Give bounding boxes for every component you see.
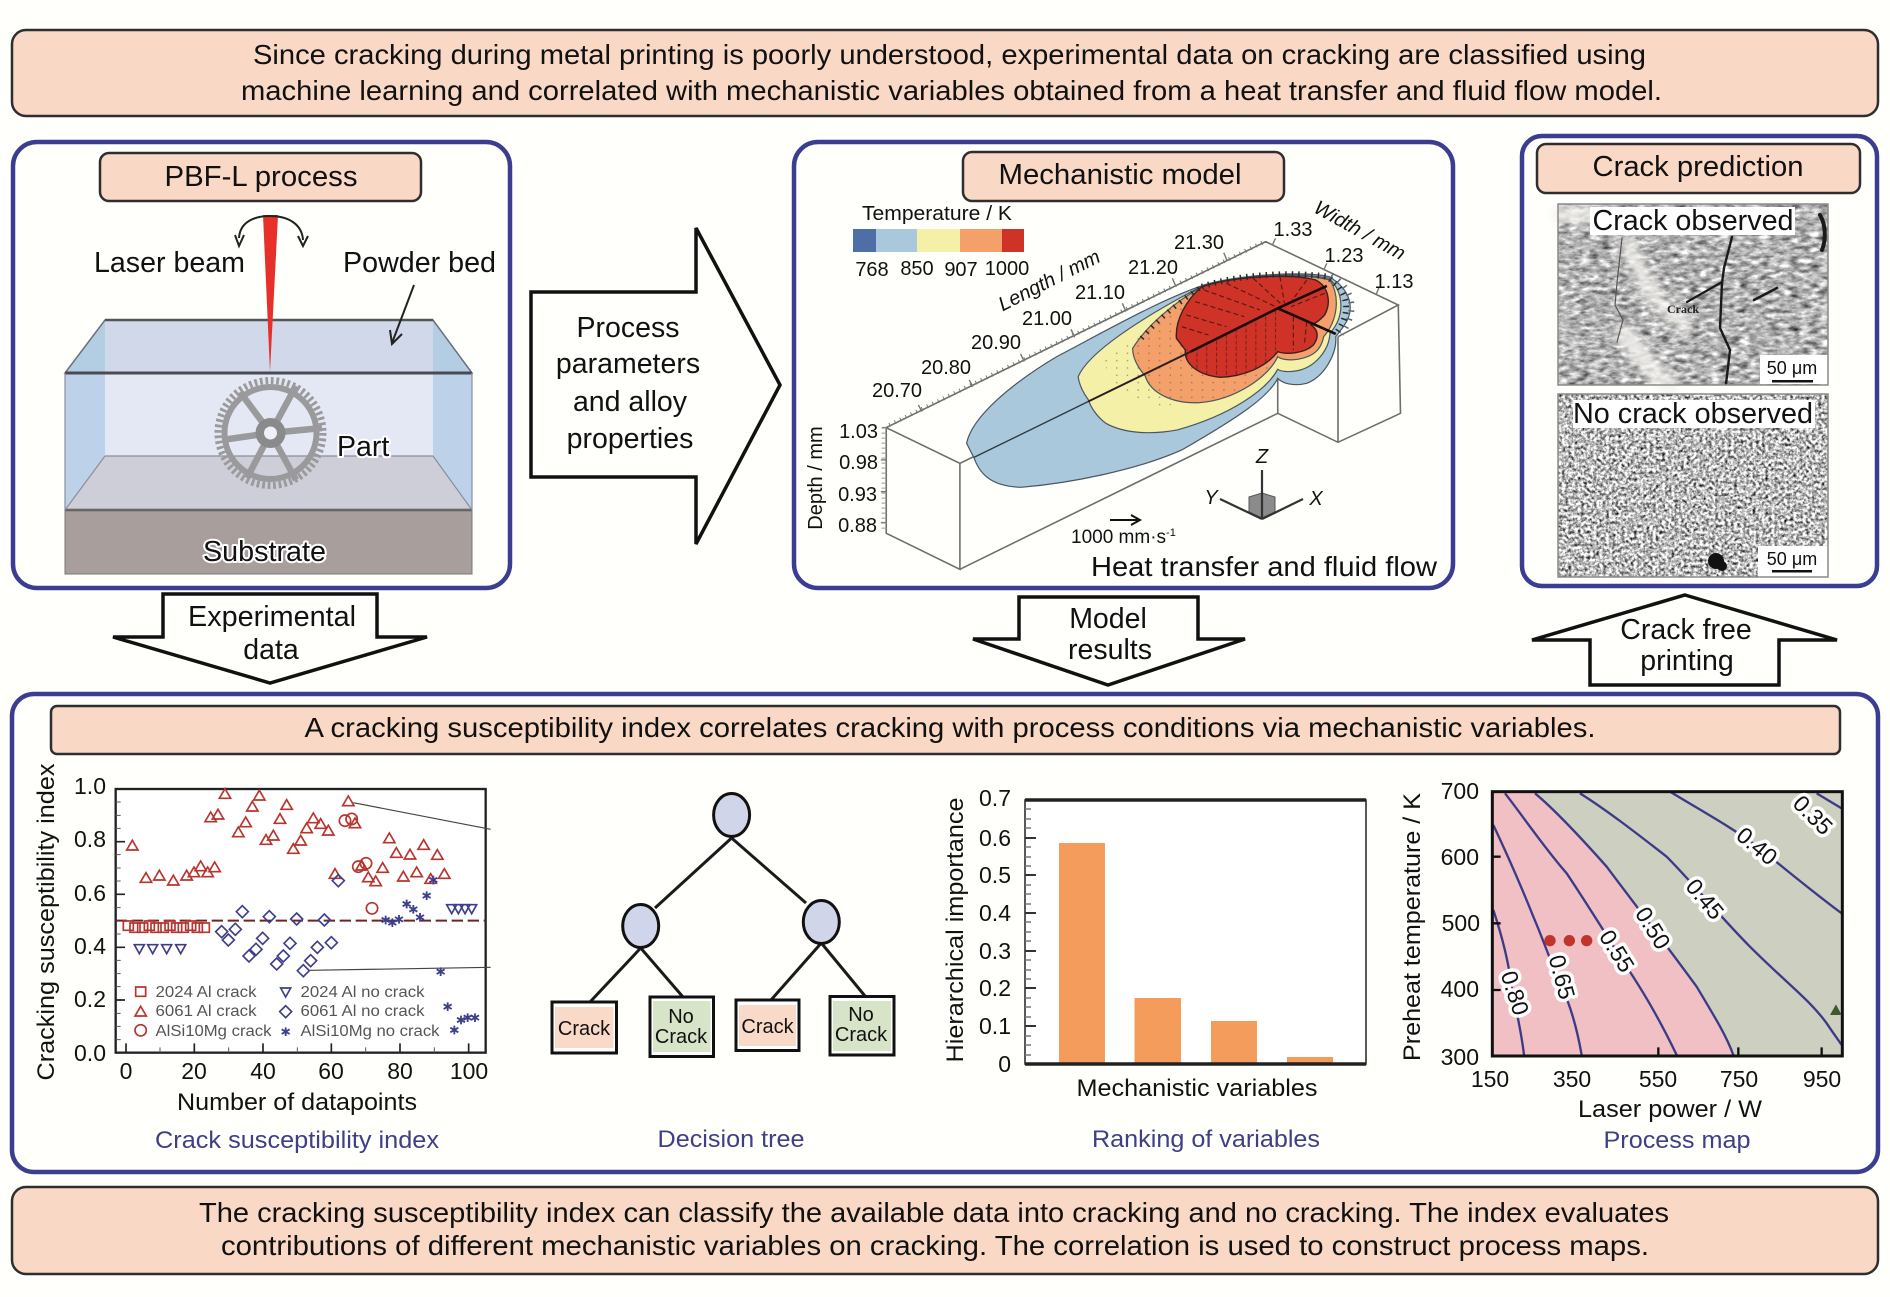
chart: ranking of variables bars xyxy=(942,785,1366,1102)
x axis labels: 60 xyxy=(318,1058,344,1084)
axis labels: length: 20.70 xyxy=(872,380,922,402)
contour labels: 0.45 xyxy=(1681,873,1729,925)
heading: cracking susceptibility index: A cracking susceptibility index correlates cracking with process conditions via mechanistic variables. xyxy=(304,712,1596,743)
process map x axis labels: 950 xyxy=(1803,1066,1841,1092)
micrograph: crack observed: Crack xyxy=(1667,302,1699,316)
leaf: no crack: No xyxy=(668,1006,694,1028)
bars xyxy=(1059,843,1333,1064)
axis labels: depth: Depth / mm xyxy=(805,426,827,530)
velocity scale arrow: 1000 mm·s xyxy=(1071,527,1166,548)
contour labels: 0.35 xyxy=(1788,790,1838,840)
x axis labels: 40 xyxy=(250,1058,276,1084)
legend labels xyxy=(156,984,440,1040)
leaf: crack: Crack xyxy=(558,1018,611,1040)
bar chart axis labels: 0.5 xyxy=(979,862,1011,888)
contour: orange xyxy=(1133,276,1336,403)
bar chart axis labels: Mechanistic variables xyxy=(1076,1075,1318,1102)
series: AlSi10Mg no crack xyxy=(382,876,479,1034)
legend markers xyxy=(135,987,292,1036)
leaf: crack xyxy=(736,1000,799,1050)
legend: temperature: Temperature / K xyxy=(862,203,1013,225)
x axis labels: 20 xyxy=(181,1058,207,1084)
flow vectors xyxy=(1182,277,1325,350)
series: 6061 Al no crack xyxy=(216,875,344,977)
panel: cracking susceptibility index xyxy=(12,694,1878,1172)
panel: PBF-L process xyxy=(13,142,510,588)
leaf: no crack xyxy=(650,997,714,1056)
y axis labels: 0.2 xyxy=(74,986,106,1012)
series: AlSi10Mg crack xyxy=(339,813,378,914)
heading: PBF-L process: PBF-L process xyxy=(164,161,358,193)
caption: crack susceptibility index: Crack susceptibility index xyxy=(155,1127,439,1154)
micrograph: crack observed xyxy=(1558,204,1828,385)
process map x axis labels: Laser power / W xyxy=(1578,1096,1762,1123)
arrow: model results: results xyxy=(1068,634,1152,666)
leaf: crack: Crack xyxy=(741,1016,795,1038)
arrow: model results xyxy=(973,597,1245,685)
y axis labels: Cracking susceptibility index xyxy=(33,764,60,1080)
arrow: process parameters and alloy properties: Process xyxy=(577,312,679,344)
contour labels: 0.80 xyxy=(1496,968,1534,1018)
icon: XYZ axes: Z xyxy=(1255,446,1269,468)
y axis labels: 0.6 xyxy=(74,880,106,906)
x axis labels: Number of datapoints xyxy=(177,1089,417,1116)
x axis labels: 0 xyxy=(120,1058,132,1084)
bar chart axis labels: 0.6 xyxy=(979,825,1011,851)
process map x axis labels: 150 xyxy=(1471,1066,1509,1092)
heading: PBF-L process xyxy=(100,153,421,201)
process map y axis labels xyxy=(1399,778,1480,1070)
axis labels: width: 1.13 xyxy=(1375,271,1413,293)
axis labels: length: 21.20 xyxy=(1128,257,1178,279)
diagram: decision tree xyxy=(552,794,894,1056)
panel: Mechanistic model xyxy=(794,142,1453,588)
series: 2024 Al crack xyxy=(123,921,209,932)
bar chart axis labels: Hierarchical importance xyxy=(942,798,969,1062)
series: 6061 Al crack xyxy=(127,789,450,886)
heading: Mechanistic model xyxy=(963,152,1284,201)
contour: blue xyxy=(967,274,1350,487)
axis labels: width: 1.23 xyxy=(1325,245,1363,267)
axis labels: width xyxy=(1274,197,1413,293)
3D melt pool model xyxy=(881,238,1400,569)
process map x axis labels xyxy=(1471,1066,1841,1123)
plot area xyxy=(116,789,491,1053)
caption: process map: Process map xyxy=(1604,1127,1750,1154)
axis labels: length: 20.90 xyxy=(971,332,1021,354)
axis labels: depth: 0.98 xyxy=(839,452,878,474)
label: Substrate: Substrate xyxy=(203,536,326,568)
caption: decision tree: Decision tree xyxy=(658,1126,804,1153)
leaf: no crack xyxy=(830,996,894,1055)
series: 2024 Al no crack xyxy=(134,905,477,954)
block outline xyxy=(886,242,1400,569)
icon: XYZ axes: Y xyxy=(1204,487,1219,509)
heading: Mechanistic model: Mechanistic model xyxy=(998,159,1242,191)
axis labels: depth: 0.93 xyxy=(838,484,877,506)
top summary banner xyxy=(12,30,1878,116)
caption: heat transfer and fluid flow: Heat transfer and fluid flow xyxy=(1091,551,1437,582)
micrograph: crack observed: 50 μm xyxy=(1767,358,1817,378)
x axis labels: 100 xyxy=(450,1058,488,1084)
arrow: crack free printing: printing xyxy=(1640,645,1734,677)
bar chart axis labels: 0.7 xyxy=(979,785,1011,811)
centre lines xyxy=(974,402,1088,457)
axis labels: depth: 0.88 xyxy=(838,515,877,537)
bottom summary banner xyxy=(12,1187,1878,1274)
micrograph: no crack observed: 50 μm xyxy=(1767,549,1817,569)
arrow: experimental data: data xyxy=(243,634,299,666)
arrow: experimental data xyxy=(113,594,427,683)
arrow: model results: Model xyxy=(1069,603,1147,635)
axis labels: depth xyxy=(805,421,878,537)
icon: laser beam xyxy=(263,215,278,372)
icon: gear part xyxy=(218,380,323,486)
heading: Crack prediction: Crack prediction xyxy=(1592,151,1804,183)
contour labels: 0.65 xyxy=(1544,952,1580,1002)
process map y axis labels: 700 xyxy=(1441,778,1479,804)
map regions xyxy=(1492,792,1842,1056)
node: left xyxy=(623,904,659,948)
arrow: process parameters and alloy properties: properties xyxy=(567,423,693,455)
micrograph: crack observed: Crack observed xyxy=(1592,205,1794,237)
contour labels: 0.55 xyxy=(1594,925,1640,977)
y axis labels: 0.0 xyxy=(74,1040,106,1066)
leaf: no crack: Crack xyxy=(655,1026,708,1048)
heading: cracking susceptibility index xyxy=(51,706,1840,754)
legend: temperature: 850 xyxy=(900,258,934,280)
caption: ranking of variables: Ranking of variables xyxy=(1092,1126,1320,1153)
icon: laser scan arc arrows xyxy=(235,216,308,246)
velocity scale arrow xyxy=(1071,515,1176,548)
legend: temperature: 907 xyxy=(944,259,978,281)
arrow: crack free printing xyxy=(1532,595,1837,685)
axis labels: depth: 1.03 xyxy=(839,421,878,443)
process map y axis labels: 500 xyxy=(1442,910,1480,936)
top summary banner: machine learning and correlated with mechanistic variables obtained from a heat transfer and fluid flow model. xyxy=(241,75,1662,106)
leaf: no crack: Crack xyxy=(835,1024,888,1046)
contour labels: 0.40 xyxy=(1731,822,1783,870)
micrograph: no crack observed xyxy=(1558,394,1828,577)
legend labels: 2024 Al no crack xyxy=(300,984,425,1001)
axis labels: length: Length / mm xyxy=(995,246,1104,316)
axis labels: width: Width / mm xyxy=(1310,197,1409,265)
panel: Crack prediction xyxy=(1522,136,1877,586)
process map x axis labels: 350 xyxy=(1553,1066,1591,1092)
axis labels: length: 21.30 xyxy=(1174,232,1224,254)
y axis labels: 1.0 xyxy=(74,773,106,799)
marker: green triangle xyxy=(1830,1004,1842,1015)
micrograph: no crack observed: No crack observed xyxy=(1573,398,1813,430)
y axis labels: 0.8 xyxy=(74,826,106,852)
bar chart axis labels: 0.3 xyxy=(979,938,1011,964)
icon: XYZ axes: X xyxy=(1308,488,1323,510)
process map y axis labels: 600 xyxy=(1441,844,1479,870)
arrow: powder bed pointer xyxy=(390,285,414,344)
x axis labels: 80 xyxy=(387,1058,413,1084)
y axis labels xyxy=(33,764,106,1080)
axis ticks xyxy=(881,238,1379,523)
x axis labels xyxy=(120,1058,488,1116)
legend labels: 6061 Al crack xyxy=(156,1003,257,1020)
heading: Crack prediction xyxy=(1537,144,1860,193)
chart: process map xyxy=(1399,778,1842,1123)
axis labels: length: 21.00 xyxy=(1022,308,1072,330)
legend: temperature xyxy=(853,203,1029,281)
top summary banner: Since cracking during metal printing is poorly understood, experimental data on cracking are classified using xyxy=(253,39,1646,70)
contour: yellow xyxy=(1078,275,1341,433)
chart: crack susceptibility index scatter xyxy=(33,764,491,1116)
label: Part: Part xyxy=(337,431,389,463)
frame xyxy=(1492,792,1842,1056)
process map y axis labels: Preheat temperature / K xyxy=(1399,793,1426,1061)
marker: red data points xyxy=(1544,935,1592,946)
process map y axis labels: 400 xyxy=(1441,976,1479,1002)
leaf: no crack: No xyxy=(848,1004,874,1026)
legend labels: AlSi10Mg no crack xyxy=(300,1023,440,1040)
arrow: crack free printing: Crack free xyxy=(1620,614,1752,646)
axis labels: length xyxy=(872,232,1224,402)
bottom summary banner: contributions of different mechanistic variables on cracking. The correlation is used to construct process maps. xyxy=(221,1230,1649,1261)
arrow: process parameters and alloy properties: parameters xyxy=(556,348,700,380)
legend labels: AlSi10Mg crack xyxy=(156,1023,272,1040)
bar chart axis labels: 0.1 xyxy=(979,1013,1011,1039)
arrow: process parameters and alloy properties: and alloy xyxy=(573,386,688,418)
node: right xyxy=(803,900,839,944)
contour: red xyxy=(1176,276,1328,377)
contour labels: 0.50 xyxy=(1630,902,1676,954)
axis labels: length: 20.80 xyxy=(921,357,971,379)
powder bed chamber illustration xyxy=(65,320,472,574)
label: Laser beam: Laser beam xyxy=(94,247,245,279)
bar chart axis labels: 0.4 xyxy=(979,900,1011,926)
bar chart axis labels: 0 xyxy=(998,1051,1011,1077)
process map x axis labels: 550 xyxy=(1639,1066,1677,1092)
icon: XYZ axes xyxy=(1204,446,1323,519)
axis labels: length: 21.10 xyxy=(1075,282,1125,304)
legend labels: 2024 Al crack xyxy=(156,984,257,1001)
label: Powder bed: Powder bed xyxy=(343,247,496,279)
bar chart axis labels xyxy=(942,785,1318,1102)
legend: temperature: 768 xyxy=(855,259,889,281)
y axis labels: 0.4 xyxy=(74,933,106,959)
arrow: experimental data: Experimental xyxy=(188,601,356,633)
legend: temperature: 1000 xyxy=(985,258,1029,280)
node: root xyxy=(714,794,750,836)
velocity scale arrow: -1 xyxy=(1166,527,1176,539)
bar chart axis labels: 0.2 xyxy=(979,975,1011,1001)
contour lines xyxy=(1493,792,1842,1055)
bottom summary banner: The cracking susceptibility index can classify the available data into cracking and no cracking. The index evaluates xyxy=(199,1197,1669,1228)
legend labels: 6061 Al no crack xyxy=(300,1003,425,1020)
contour labels xyxy=(1496,790,1838,1018)
arrow: process parameters and alloy properties xyxy=(531,228,780,544)
process map x axis labels: 750 xyxy=(1720,1066,1758,1092)
leaf: crack xyxy=(552,1002,616,1053)
process map y axis labels: 300 xyxy=(1441,1044,1479,1070)
axis labels: width: 1.33 xyxy=(1274,219,1312,241)
